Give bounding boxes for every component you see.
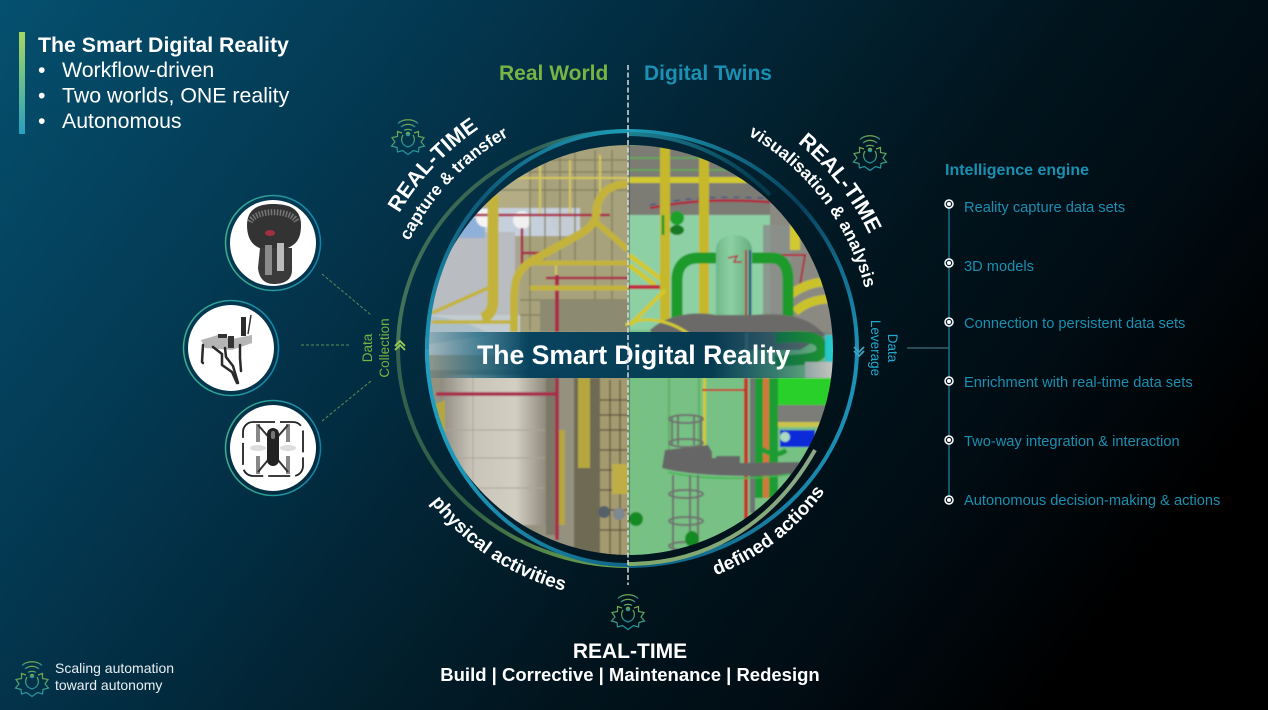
device: robot dog [184, 300, 278, 396]
device: scanner camera [226, 196, 320, 290]
intelligence engine list: 3D models [964, 259, 1034, 275]
top-left key points: The Smart Digital Reality [38, 33, 289, 57]
intelligence engine timeline [945, 200, 953, 504]
digital twin render half [625, 140, 839, 560]
intelligence engine list: Autonomous decision-making & actions [964, 493, 1220, 509]
icon: gear wifi top right [854, 136, 886, 170]
data collection label: Data [360, 333, 375, 362]
intelligence engine list [964, 200, 1220, 509]
curved label: real-time capture: capture & transfer [402, 128, 506, 240]
intelligence engine list: Two-way integration & interaction [964, 434, 1180, 450]
band title: The Smart Digital Reality [477, 340, 791, 370]
intelligence engine list: Enrichment with real-time data sets [964, 375, 1193, 391]
data leverage label: Data [885, 334, 900, 363]
curved label: physical activities: physical activities [428, 496, 566, 590]
ring: digital twin arcs [628, 131, 857, 566]
intelligence engine heading: Intelligence engine [945, 162, 1089, 179]
footer note [55, 660, 174, 693]
footer note: Scaling automation [55, 660, 174, 676]
title band [425, 332, 837, 378]
dashed connectors to data collection [301, 274, 371, 421]
heading: Real World: Real World [499, 62, 608, 85]
top-left key points: • [38, 109, 45, 133]
curved label: real-time visualisation: REAL-TIME [798, 132, 882, 234]
real world photo half [420, 140, 629, 560]
data collection label: Collection [377, 318, 392, 378]
icon: data collection chevron [395, 341, 405, 350]
central photo circle [420, 140, 839, 560]
data collection label [360, 318, 392, 378]
top-left key points: Two worlds, ONE reality [62, 84, 290, 108]
icon: data leverage chevron [854, 347, 864, 356]
connector to intelligence engine [907, 347, 949, 349]
centre dashed divider [627, 65, 629, 585]
top-left key points [38, 33, 290, 133]
curved label: real-time capture: REAL-TIME [387, 117, 478, 212]
bottom real-time caption: Build | Corrective | Maintenance | Redesign [440, 664, 820, 685]
icon: gear wifi bottom [612, 595, 644, 630]
ring: real world arcs [398, 131, 628, 566]
intelligence engine list: Connection to persistent data sets [964, 316, 1185, 332]
heading: Digital Twins: Digital Twins [644, 62, 772, 85]
top-left key points: Workflow-driven [62, 58, 214, 82]
bottom real-time caption: REAL-TIME [573, 640, 687, 663]
accent bar [19, 32, 25, 134]
top-left key points: • [38, 58, 45, 82]
data leverage label: Leverage [868, 320, 883, 376]
top-left key points: Autonomous [62, 109, 182, 133]
curved label: real-time visualisation: visualisation & analysis [751, 127, 874, 288]
bottom real-time caption [440, 640, 820, 685]
footer note: toward autonomy [55, 677, 162, 693]
data leverage label [868, 320, 900, 376]
device: drone [226, 400, 320, 496]
icon: gear wifi top left [392, 120, 424, 154]
curved label: defined actions: defined actions [714, 487, 824, 574]
top-left key points: • [38, 84, 45, 108]
icon: gear wifi footer [16, 662, 48, 696]
intelligence engine list: Reality capture data sets [964, 200, 1125, 216]
